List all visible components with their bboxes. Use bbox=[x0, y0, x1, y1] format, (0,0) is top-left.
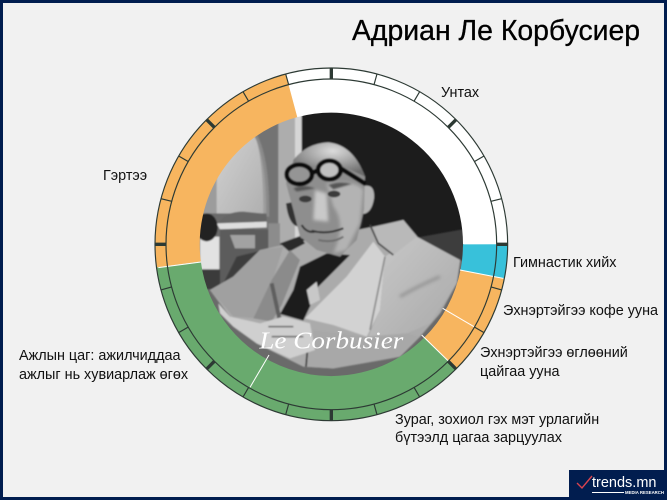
label: morning tea: Эхнэртэйгээ өглөөний bbox=[480, 345, 628, 361]
collar dark bbox=[280, 236, 305, 252]
label: creative bbox=[395, 412, 599, 446]
signature: Le Corbusier bbox=[258, 329, 404, 355]
collar bbox=[373, 220, 417, 255]
label: work: ажлыг нь хувиарлаж өгөх bbox=[19, 367, 188, 383]
donut chart: daily routine bbox=[154, 67, 508, 422]
label: morning coffee: Эхнэртэйгээ кофе ууна bbox=[503, 303, 658, 319]
label: morning tea: цайгаа ууна bbox=[480, 364, 560, 380]
clock ring bbox=[155, 68, 508, 421]
label: creative: бүтээлд цагаа зарцуулах bbox=[395, 430, 562, 446]
lapel bbox=[305, 242, 385, 337]
logo: trends.mn: MEDIA RESEARCH bbox=[625, 490, 664, 495]
hands bbox=[218, 303, 315, 358]
hour ticks bbox=[161, 74, 502, 415]
shirt bbox=[280, 253, 350, 321]
label: at home: Гэртээ bbox=[103, 168, 147, 184]
ring segments bbox=[177, 90, 485, 398]
segment: coffee and breakfast bbox=[440, 274, 482, 353]
label: work bbox=[19, 348, 188, 383]
segment: sleep bbox=[291, 90, 485, 244]
label: morning tea bbox=[480, 345, 628, 380]
glasses bbox=[287, 161, 366, 184]
right body bbox=[368, 237, 460, 337]
white separators bbox=[158, 262, 503, 387]
label: sleep: Унтах bbox=[441, 85, 479, 101]
head bbox=[363, 186, 374, 214]
segment: work and creative time bbox=[179, 264, 440, 398]
logo: trends.mn: trends.mn bbox=[592, 475, 656, 491]
logo: trends.mn bbox=[569, 470, 667, 500]
label: work: Ажлын цаг: ажилчиддаа bbox=[19, 348, 180, 364]
coat bbox=[210, 220, 460, 368]
sleeve bbox=[307, 330, 420, 368]
segment: gymnastics bbox=[482, 244, 485, 274]
scarf bbox=[253, 250, 300, 322]
title: Адриан Ле Корбусиер bbox=[352, 15, 640, 47]
label: gymnastics: Гимнастик хийх bbox=[513, 255, 616, 271]
photo: portrait of Le Corbusier bbox=[196, 107, 470, 380]
segment: at home bbox=[177, 96, 291, 264]
label: creative: Зураг, зохиол гэх мэт урлагийн bbox=[395, 412, 599, 428]
